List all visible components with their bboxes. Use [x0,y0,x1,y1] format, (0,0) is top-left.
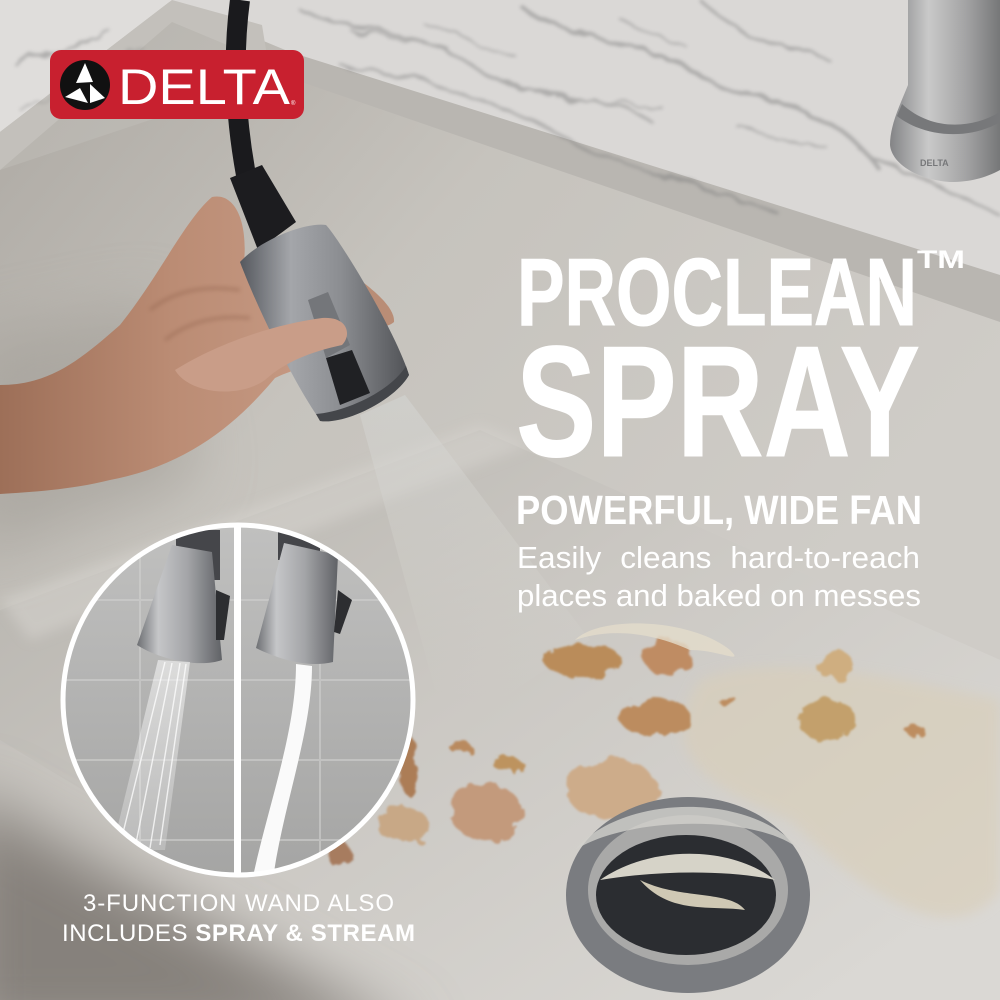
thumb [175,318,347,391]
faucet base [890,0,1000,182]
Delta logo badge [50,50,304,119]
description [517,540,921,613]
fingers behind head [360,280,394,326]
inset caption [62,890,415,947]
headline: TM [917,246,965,274]
spray head [230,165,409,421]
faucet base: DELTA [920,158,949,168]
headline [516,239,965,490]
inset caption: 3-FUNCTION WAND ALSO [83,890,394,917]
right wand: stream [254,525,352,872]
spray fan [360,395,590,700]
logo emblem [60,60,110,110]
drain [566,797,810,993]
inset caption: INCLUDES SPRAY & STREAM [62,920,415,947]
marble countertop [0,0,1000,322]
Delta logo badge: ® [291,100,296,107]
inset comparison circle [60,523,420,877]
Delta logo badge: DELTA [118,59,291,115]
subheading: POWERFUL, WIDE FAN [516,487,922,533]
hand [0,196,345,494]
description: Easily cleans hard-to-reach [517,540,920,575]
food residue [328,623,1000,917]
black hose [236,0,246,175]
description: places and baked on messes [517,578,921,613]
left wand: spray [112,530,230,850]
